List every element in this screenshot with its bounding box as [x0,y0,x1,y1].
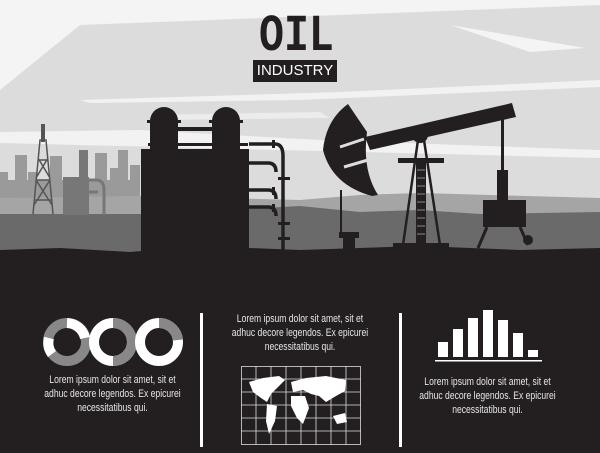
text left: Lorem ipsum dolor sit amet, sit et [49,374,176,386]
derrick left [33,140,53,214]
text right: adhuc decore legendos. Ex epicurei [419,390,556,402]
text center: Lorem ipsum dolor sit amet, sit et [237,313,363,325]
world map [241,366,361,445]
text right: Lorem ipsum dolor sit amet, sit et [424,376,551,388]
text center: necessitatibus qui. [265,341,335,353]
panel: map [232,313,368,445]
bar chart [435,310,542,362]
divider [399,313,402,447]
panel: ring charts [43,318,183,414]
panel: bar chart [419,310,556,416]
text center [232,313,368,353]
pump jack [323,103,533,251]
hills [0,193,600,250]
title [253,7,337,82]
icon: rings [43,318,183,366]
text left: adhuc decore legendos. Ex epicurei [44,388,181,400]
city skyline [0,150,140,210]
divider [200,313,203,447]
text right: necessitatibus qui. [452,404,523,416]
text left [44,374,181,414]
text center: adhuc decore legendos. Ex epicurei [232,327,368,339]
title: INDUSTRY: INDUSTRY [257,62,333,79]
text right [419,376,556,416]
refinery [141,107,290,254]
ground [0,246,600,260]
title: OIL: OIL [259,7,334,66]
top scene [0,0,600,252]
text left: necessitatibus qui. [77,402,148,414]
